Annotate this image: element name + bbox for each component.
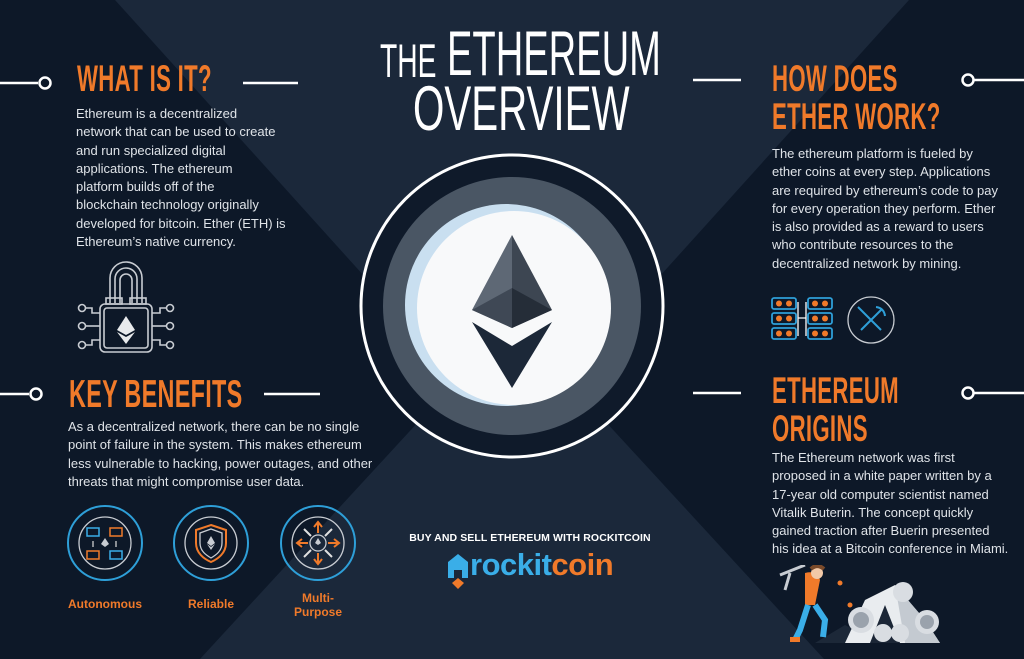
benefit: multi-purpose: Purpose — [294, 605, 342, 619]
text: is also provided as a reward to users — [772, 219, 984, 234]
text: applications. The ethereum — [76, 161, 233, 176]
heading: WHAT IS IT? — [77, 58, 212, 99]
text: for every operation they perform. Ether — [772, 201, 995, 216]
icon: ethereum logo — [472, 235, 552, 388]
heading: KEY BENEFITS — [69, 373, 243, 416]
title — [380, 19, 661, 144]
text: who contribute resources to the — [772, 237, 953, 252]
text: 17-year old computer scientist named — [772, 487, 989, 502]
section: what is it — [0, 58, 298, 249]
text: As a decentralized network, there can be no single — [68, 419, 359, 434]
icon: server nodes — [771, 297, 833, 340]
call to action: rockitcoin: rockitcoin — [470, 547, 613, 582]
heading: ETHER WORK? — [772, 96, 941, 137]
title: OVERVIEW — [413, 74, 630, 144]
text: The Ethereum network was first — [772, 450, 955, 465]
text: Vitalik Buterin. The concept quickly — [772, 505, 973, 520]
heading — [772, 58, 941, 137]
title: THE — [380, 34, 436, 87]
central ethereum emblem — [360, 154, 664, 458]
heading: ORIGINS — [772, 408, 868, 449]
benefit: reliable — [173, 505, 249, 611]
text: developed for bitcoin. Ether (ETH) is — [76, 216, 286, 231]
text: threats that might compromise user data. — [68, 474, 304, 489]
text: decentralized network by mining. — [772, 256, 961, 271]
text: Ethereum’s native currency. — [76, 234, 236, 249]
text: platform builds off of the — [76, 179, 215, 194]
text: ether coins at every step. Applications — [772, 164, 990, 179]
text: gained traction after Buerin presented — [772, 523, 990, 538]
text — [772, 146, 998, 271]
illustration: miner with ether rocks — [780, 565, 940, 643]
text — [76, 106, 286, 249]
text: proposed in a white paper written by a — [772, 468, 992, 483]
text: his idea at a Bitcoin conference in Miami. — [772, 541, 1008, 556]
heading — [772, 370, 899, 449]
text: Ethereum is a decentralized — [76, 106, 237, 121]
call to action: rockitcoin — [409, 532, 651, 589]
icon: circuit lock — [78, 261, 174, 353]
text: less vulnerable to hacking, power outages, and other — [68, 456, 372, 471]
text: are required by ethereum’s code to pay — [772, 183, 998, 198]
text: point of failure in the system. This makes ethereum — [68, 437, 362, 452]
benefit: multi-purpose — [280, 505, 356, 619]
benefit: autonomous: Autonomous — [68, 597, 142, 611]
heading: ETHEREUM — [772, 370, 899, 411]
text: and run specialized digital — [76, 143, 226, 158]
section: ethereum origins — [693, 370, 1024, 556]
text: The ethereum platform is fueled by — [772, 146, 973, 161]
logo — [448, 554, 468, 589]
benefit: reliable: Reliable — [188, 597, 234, 611]
icon: mining tools — [847, 296, 895, 344]
section: key benefits — [0, 373, 372, 489]
text — [772, 450, 1008, 556]
call to action: rockitcoin: BUY AND SELL ETHEREUM WITH ROCKITCOIN — [409, 532, 651, 544]
heading: HOW DOES — [772, 58, 898, 99]
section: how does ether work — [693, 58, 1024, 271]
benefit: autonomous — [67, 505, 143, 611]
text — [68, 419, 372, 489]
title: ETHEREUM — [447, 19, 661, 89]
benefit: multi-purpose: Multi- — [302, 591, 334, 605]
text: network that can be used to create — [76, 124, 275, 139]
text: blockchain technology originally — [76, 197, 259, 212]
